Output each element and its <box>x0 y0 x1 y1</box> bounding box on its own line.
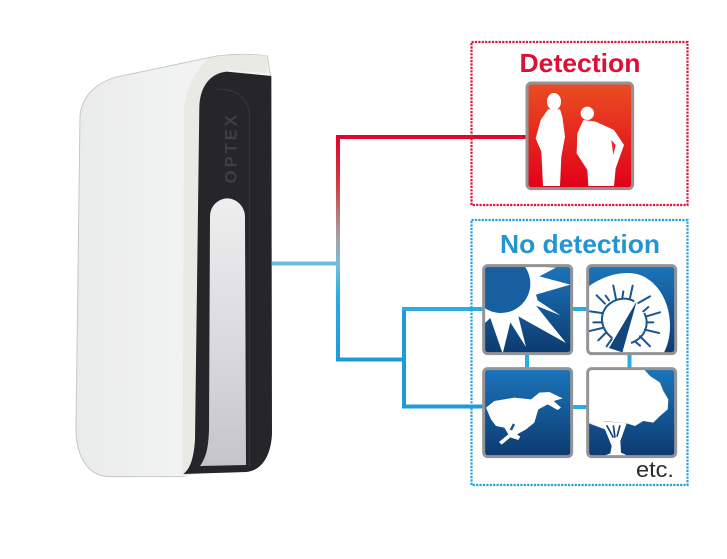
icon: sun <box>482 264 574 356</box>
icon: wind gauge <box>588 266 676 354</box>
label: etc.: etc. <box>636 457 674 482</box>
device brand label: OPTEX <box>222 115 241 183</box>
infographic canvas <box>76 40 689 486</box>
icon: tree <box>588 369 676 457</box>
heading: no detection: No detection <box>500 229 660 259</box>
icon: running dog <box>484 369 572 457</box>
sensor device <box>76 54 272 477</box>
icon: people <box>527 83 633 189</box>
device window <box>200 198 246 466</box>
panel: detection <box>472 42 688 205</box>
panel: no detection <box>472 220 688 485</box>
heading: detection: Detection <box>520 48 640 78</box>
connector lines <box>272 137 630 408</box>
